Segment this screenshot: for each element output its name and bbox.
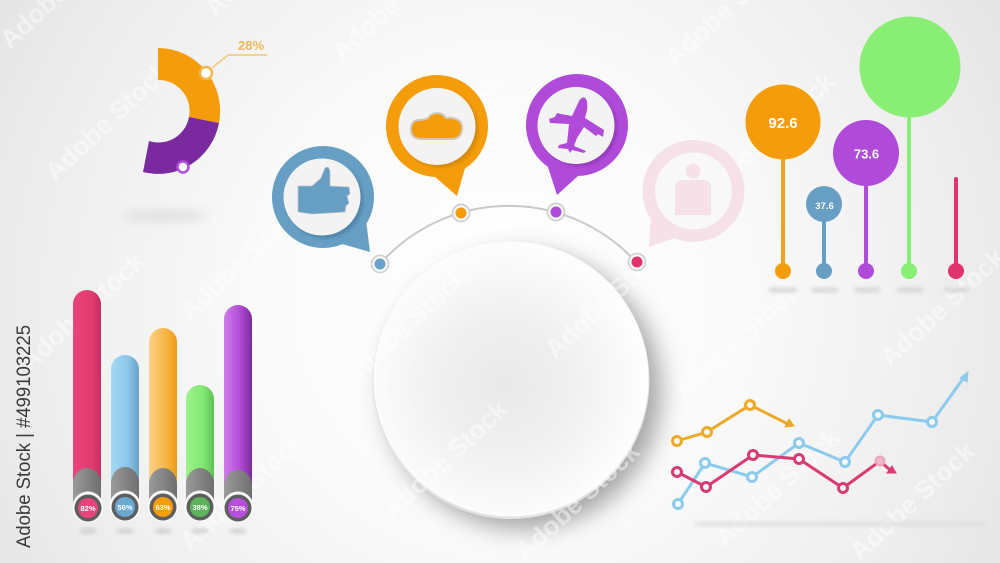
lollipop: 73.6 — [833, 120, 899, 279]
timeline arc — [372, 204, 646, 272]
lollipop chart — [746, 16, 970, 292]
donut purple segment — [143, 117, 219, 174]
watermark pattern: Adobe Stock — [377, 394, 514, 524]
watermark pattern: Adobe Stock — [704, 66, 841, 196]
lollipop: green — [860, 16, 960, 279]
bar: 63% — [148, 328, 178, 522]
bar: 56% — [110, 355, 140, 522]
bar: 82%: 82% — [80, 504, 96, 513]
bar: 38%: 38% — [192, 503, 208, 512]
icon: thumb — [298, 167, 350, 214]
bar: 56%: 56% — [117, 503, 133, 512]
line: blue — [674, 372, 968, 508]
bar shadows — [79, 529, 247, 533]
watermark pattern: Adobe Stock — [372, 64, 509, 194]
node purple — [548, 204, 564, 220]
lollipop: pink — [948, 177, 964, 279]
watermark pattern: Adobe Stock — [509, 436, 646, 563]
line: orange — [672, 400, 794, 446]
watermark pattern: Adobe Stock — [337, 261, 474, 391]
side label: stock id: Adobe Stock | #499103225 — [14, 325, 35, 548]
donut markers — [200, 67, 212, 79]
donut chart — [121, 38, 267, 222]
line chart — [672, 372, 985, 526]
watermark pattern: Adobe Stock — [709, 422, 846, 552]
line chart shadow — [695, 522, 985, 526]
lollipop shadows — [769, 288, 970, 292]
node pink — [628, 254, 646, 270]
watermark pattern: Adobe Stock — [844, 436, 981, 563]
donut orange segment — [158, 48, 220, 123]
watermark pattern: Adobe Stock — [174, 196, 311, 326]
node blue — [372, 256, 388, 272]
bar: 63%: 63% — [155, 503, 171, 512]
node orange — [452, 204, 470, 222]
watermark pattern: Adobe Stock — [14, 246, 151, 376]
bar: 38% — [184, 385, 216, 522]
line: pink — [672, 450, 896, 492]
disc rim — [372, 242, 650, 519]
pin: person (faded) — [642, 140, 744, 247]
pin: cloud — [386, 75, 488, 196]
watermark pattern: Adobe Stock — [39, 56, 176, 186]
pin: plane — [526, 74, 628, 195]
watermark pattern: Adobe Stock — [174, 426, 311, 556]
bar: 82% — [72, 290, 104, 522]
bar chart — [72, 290, 254, 533]
bar: 75%: 75% — [230, 504, 246, 513]
icon: cloud — [411, 113, 462, 139]
callout value: 28% — [238, 38, 264, 53]
bar: 75% — [222, 305, 254, 522]
pin: thumbs up — [272, 146, 374, 252]
lollipop: 73.6: 73.6 — [854, 146, 879, 162]
center disc — [372, 242, 661, 529]
lollipop: 92.6: 92.6 — [768, 115, 798, 132]
callout leader line — [212, 55, 267, 68]
donut shadow — [121, 210, 209, 222]
watermark pattern: Adobe Stock — [669, 276, 806, 406]
icon: plane — [549, 97, 604, 153]
watermark pattern: Adobe Stock — [539, 234, 676, 364]
disc face — [374, 242, 648, 516]
icon: person — [675, 164, 711, 215]
lollipop: 92.6 — [746, 84, 820, 279]
lollipop: 37.6 — [806, 186, 842, 279]
lollipop: 37.6: 37.6 — [815, 201, 834, 212]
disc shadow — [385, 253, 661, 529]
